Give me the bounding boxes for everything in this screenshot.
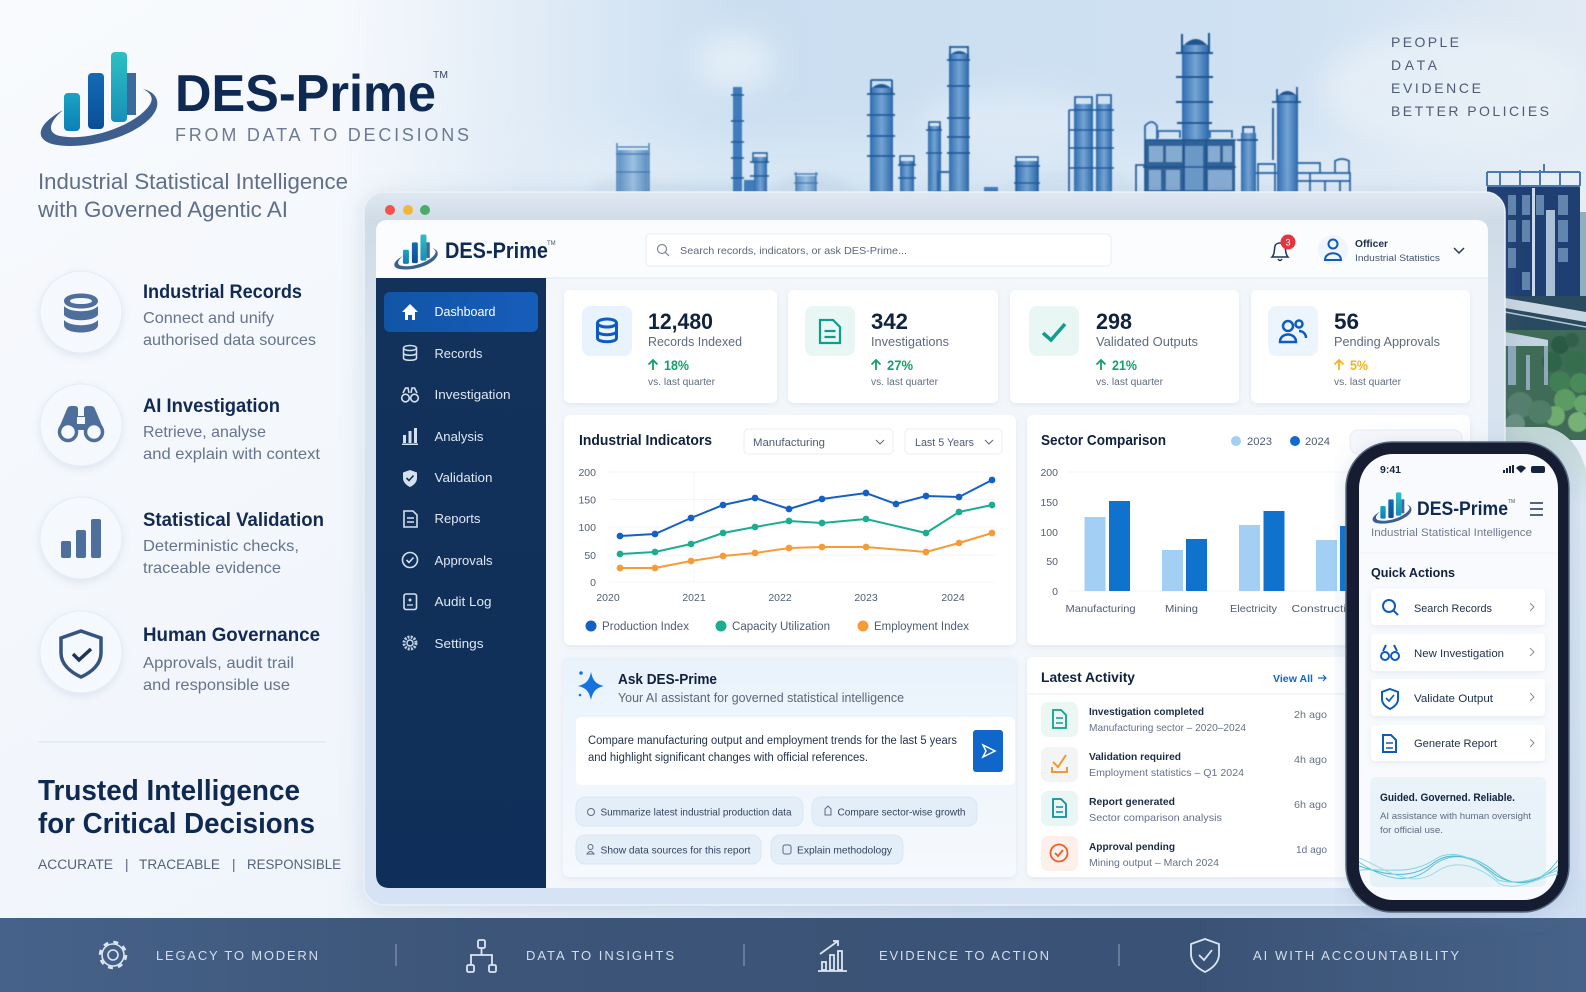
tagline: Industrial Statistical Intelligence [38,169,348,194]
window traffic lights [385,205,430,215]
footer: evidence to action: EVIDENCE TO ACTION [879,948,1049,963]
search box: Search records, indicators, or ask DES-Prime... [680,245,907,257]
activity: validation required: Employment statistics – Q1 2024 [1089,767,1244,779]
feature: human governance: and responsible use [143,677,290,694]
activity: validation required [1041,747,1327,782]
stat card: pending approvals: vs. last quarter [1334,377,1402,388]
icon: bars [61,519,101,558]
activity: approval pending: 1d ago [1296,844,1327,856]
chip: compare: Compare sector-wise growth [838,806,966,818]
values line [38,857,341,872]
tower: low stub [984,187,998,192]
phone logo: TM [1508,499,1515,505]
feature: human governance: Approvals, audit trail [143,655,294,672]
tower: short column [744,153,769,192]
user profile: Officer [1355,239,1388,250]
bar chart [1040,467,1361,615]
tower: slim right column [1237,127,1258,192]
tower: medium column [926,122,958,192]
chip: methodology [771,835,903,864]
top bar logo: DES-Prime [445,238,548,263]
stat card: records indexed: 12,480 [648,309,713,334]
phone screen [1359,454,1558,900]
search box [646,234,1111,266]
panel: sector comparison chart [1027,415,1470,645]
dropdown: period: Last 5 Years [915,437,974,449]
tower: twin cluster [1069,95,1114,192]
stat card: validated outputs: vs. last quarter [1096,377,1164,388]
activity: report generated: 6h ago [1294,799,1327,811]
action: validate output [1371,679,1545,716]
notification bell: 3 [1285,238,1291,248]
arrow: up [1096,360,1106,370]
footer: data to insights: DATA TO INSIGHTS [526,948,674,963]
action: search records: Search Records [1414,603,1492,615]
tower: tall column [867,80,895,192]
stat card: records indexed: Records Indexed [648,334,742,349]
line chart: 2022 [768,592,792,604]
line chart: 2023 [854,592,878,604]
tower: main platform lattice [1136,122,1236,192]
tower: distant short [794,172,818,192]
top bar [376,220,1488,278]
prompt box: Compare manufacturing output and employment trends for the last 5 years [588,735,957,747]
feature: statistical validation [40,497,324,579]
notification bell [1272,234,1296,260]
chip: summarize [576,797,803,826]
status bar: 9:41 [1380,465,1401,476]
heading: trusted intelligence: for Critical Decisions [38,808,315,840]
activity: investigation completed: Investigation completed [1089,706,1204,718]
stat card: investigations [788,290,998,403]
bar chart: 200 [1040,467,1058,479]
nav: approvals: Approvals [434,554,492,568]
stat card: pending approvals: Pending Approvals [1334,334,1440,349]
chart legend: Capacity Utilization [732,621,830,633]
nav: investigation [402,388,511,402]
line chart: 2020 [596,592,620,604]
stat card: validated outputs: 21% [1112,358,1137,373]
nav: reports: Reports [434,512,480,526]
panel: latest activity: View All [1273,673,1313,685]
chart legend [586,620,969,633]
panel: industrial indicators chart: Industrial Indicators [579,432,712,449]
bar chart: 100 [1040,527,1058,539]
dropdown: period [905,429,1002,454]
phone body [1346,442,1569,912]
bar chart: 150 [1040,497,1058,509]
stat card: records indexed: vs. last quarter [648,377,716,388]
stat card: records indexed: 18% [664,358,689,373]
chip: summarize: Summarize latest industrial production data [600,806,792,818]
panel: sector comparison chart: Sector Comparison [1041,432,1166,449]
arrow: view all [1318,675,1326,681]
series: capacity utilization [617,502,995,557]
panel: industrial indicators chart [564,415,1016,645]
chip: data sources: Show data sources for this report [600,844,751,856]
values line: | [125,857,129,872]
icon: bar chart logo [41,52,157,146]
pipes [1505,296,1586,336]
hamburger menu [1530,503,1543,515]
lower light strip [300,880,1586,920]
footer: data to insights [467,940,674,972]
values line: TRACEABLE [139,857,220,872]
activity: investigation completed: Manufacturing sector – 2020–2024 [1089,722,1246,734]
stat card: validated outputs [1010,290,1239,403]
nav: dashboard [384,292,538,332]
motto top right: EVIDENCE [1391,80,1481,96]
values line: | [232,857,236,872]
phone logo: DES-Prime [1417,498,1508,520]
icon: binoculars [59,406,103,440]
stat card: validated outputs: Validated Outputs [1096,334,1198,349]
heading: trusted intelligence: Trusted Intelligence [38,775,300,807]
action: new investigation: New Investigation [1414,648,1504,660]
icon: sparkle [578,671,604,700]
activity: approval pending: Approval pending [1089,841,1175,853]
panel: ask DES-Prime: Ask DES-Prime [618,671,717,688]
chip: data sources [576,835,761,864]
footer: ai with accountability: AI WITH ACCOUNTABILITY [1253,948,1459,963]
tower: right column [1272,87,1301,192]
arrow: up [872,360,880,370]
line chart: 100 [578,522,596,534]
feature: industrial records: authorised data sources [143,332,316,349]
guided card: for official use. [1380,825,1443,836]
feature: ai investigation: Retrieve, analyse [143,424,266,441]
footer band [0,918,1586,992]
feature: statistical validation: Deterministic checks, [143,538,299,555]
bar chart: 0 [1052,586,1058,598]
bar chart: Construction [1292,603,1360,615]
activity: approval pending [1041,836,1327,871]
stat card: records indexed [564,290,777,403]
action: search records [1371,589,1545,625]
stat card: investigations: 342 [871,309,908,334]
tagline [37,169,348,222]
tower: small distant structure [616,143,650,192]
panel: ask DES-Prime: Your AI assistant for governed statistical intelligence [618,691,904,705]
nav: audit log: Audit Log [434,595,492,609]
phone glass corner [1505,427,1586,918]
action: generate report [1371,725,1545,761]
feature: industrial records: Connect and unify [143,310,274,327]
sidebar [376,278,546,888]
chart legend: Production Index [602,621,689,633]
sector legend [1231,436,1330,448]
nav: reports [404,511,480,527]
icon: database [64,294,98,332]
top bar logo: TM [547,241,556,247]
wave decoration [1359,854,1558,886]
phone logo [1373,492,1515,524]
bar chart: Manufacturing [1066,603,1136,615]
stat card: pending approvals: 5% [1350,358,1368,373]
nav: analysis: Analysis [434,430,484,444]
dropdown: sector [744,429,893,454]
heading: trusted intelligence [38,775,315,840]
stat card: investigations: vs. last quarter [871,377,939,388]
window glass frame [364,192,1505,905]
nav: analysis [402,428,484,445]
activity: approval pending: Mining output – March 2024 [1089,857,1219,869]
feature: statistical validation: Statistical Validation [143,509,324,531]
series: employment index [617,530,995,571]
footer: legacy to modern: LEGACY TO MODERN [156,948,318,963]
tower: main column [1176,33,1213,145]
icon: people [1280,320,1306,342]
activity: validation required: Validation required [1089,751,1181,763]
stat card: pending approvals [1251,290,1470,403]
nav: settings [404,637,484,651]
tower: low pipework [1256,159,1350,192]
logo and brand: DES-Prime [175,65,436,123]
logo and brand: FROM DATA TO DECISIONS [175,125,469,145]
feature: industrial records [40,271,316,353]
phone mockup: Industrial Statistical Intelligence [1371,527,1532,539]
feature: ai investigation [40,384,321,466]
nav: audit log [404,594,492,610]
tagline: with Governed Agentic AI [37,197,288,222]
values line: RESPONSIBLE [247,857,341,872]
guided card [1370,777,1546,887]
action: validate output: Validate Output [1414,693,1493,705]
panel: application window [364,192,1505,905]
values line: ACCURATE [38,857,113,872]
logo and brand [41,52,469,146]
prompt box [576,717,1015,785]
stat card: validated outputs: 298 [1096,309,1132,334]
trees and canopy [1505,330,1586,440]
feature: industrial records: Industrial Records [143,281,302,303]
feature: statistical validation: traceable evidence [143,560,281,577]
icon: check [1043,324,1065,340]
chart legend: Employment Index [874,621,969,633]
guided card: AI assistance with human oversight [1380,811,1531,822]
motto top right [1391,34,1549,119]
nav: validation [403,470,493,487]
nav: settings: Settings [434,637,484,651]
tower: small centre structure [1014,157,1040,192]
status bar [1380,465,1545,476]
line chart: 200 [578,467,596,479]
activity: report generated [1041,791,1327,826]
right-edge industrial photo [1487,164,1586,918]
motto top right: PEOPLE [1391,34,1459,50]
phone mockup [1346,442,1569,912]
feature: ai investigation: and explain with context [143,446,321,463]
arrow: up [1334,360,1344,370]
activity: validation required: 4h ago [1294,754,1327,766]
line chart: 2021 [682,592,706,604]
stat card: pending approvals: 56 [1334,309,1359,334]
nav: approvals [402,552,492,568]
activity: investigation completed: 2h ago [1294,709,1327,721]
motto top right: DATA [1391,57,1438,73]
panel: ask DES-Prime [563,657,1016,877]
tower: thin column [731,87,744,192]
feature: human governance: Human Governance [143,624,320,646]
chip: compare [812,797,977,826]
nav: dashboard: Dashboard [434,305,496,319]
sector legend: 2023 [1247,436,1272,448]
stat card: investigations: Investigations [871,334,949,349]
feature: ai investigation: AI Investigation [143,395,280,417]
bar chart: 50 [1046,556,1058,568]
panel: latest activity [1027,657,1352,877]
phone mockup: Quick Actions [1371,565,1455,580]
user profile: Industrial Statistics [1355,253,1440,264]
refinery structure [1487,164,1580,300]
prompt box: and highlight significant changes with official references. [588,752,868,764]
series: production index [617,477,995,539]
nav: records [404,346,482,361]
bar chart: Electricity [1230,603,1278,615]
footer: evidence to action [818,941,1049,971]
feature: human governance [40,611,320,694]
nav: records: Records [434,347,482,361]
dropdown: sector: Manufacturing [753,437,825,449]
nav: validation: Validation [434,471,493,485]
top bar logo [394,234,556,269]
activity: investigation completed [1041,702,1327,737]
sector legend: 2024 [1305,436,1330,448]
line chart: 50 [584,550,596,562]
footer: legacy to modern [100,942,318,968]
chip: methodology: Explain methodology [797,844,893,856]
action: generate report: Generate Report [1414,738,1497,750]
line chart [578,467,995,604]
guided card: Guided. Governed. Reliable. [1380,792,1515,804]
icon: database [598,319,616,342]
activity: report generated: Sector comparison analysis [1089,812,1222,824]
logo and brand: TM [433,70,448,81]
panel: latest activity: Latest Activity [1041,669,1135,685]
line chart: 150 [578,494,596,506]
bar chart: Mining [1165,603,1198,615]
activity: report generated: Report generated [1089,796,1175,808]
arrow: up [648,360,658,370]
user profile [1318,235,1464,265]
refinery skyline [616,33,1350,192]
line chart: 2024 [941,592,965,604]
footer: ai with accountability [1191,939,1459,972]
tower: short beside tall [898,156,916,192]
stat card: investigations: 27% [887,358,913,373]
line chart: 0 [590,577,596,589]
nav: investigation: Investigation [434,388,511,402]
motto top right: BETTER POLICIES [1391,103,1549,119]
tower: tallest left column [947,46,970,192]
icon: shield [61,631,101,677]
action: new investigation [1371,634,1545,671]
icon: document [820,320,840,343]
